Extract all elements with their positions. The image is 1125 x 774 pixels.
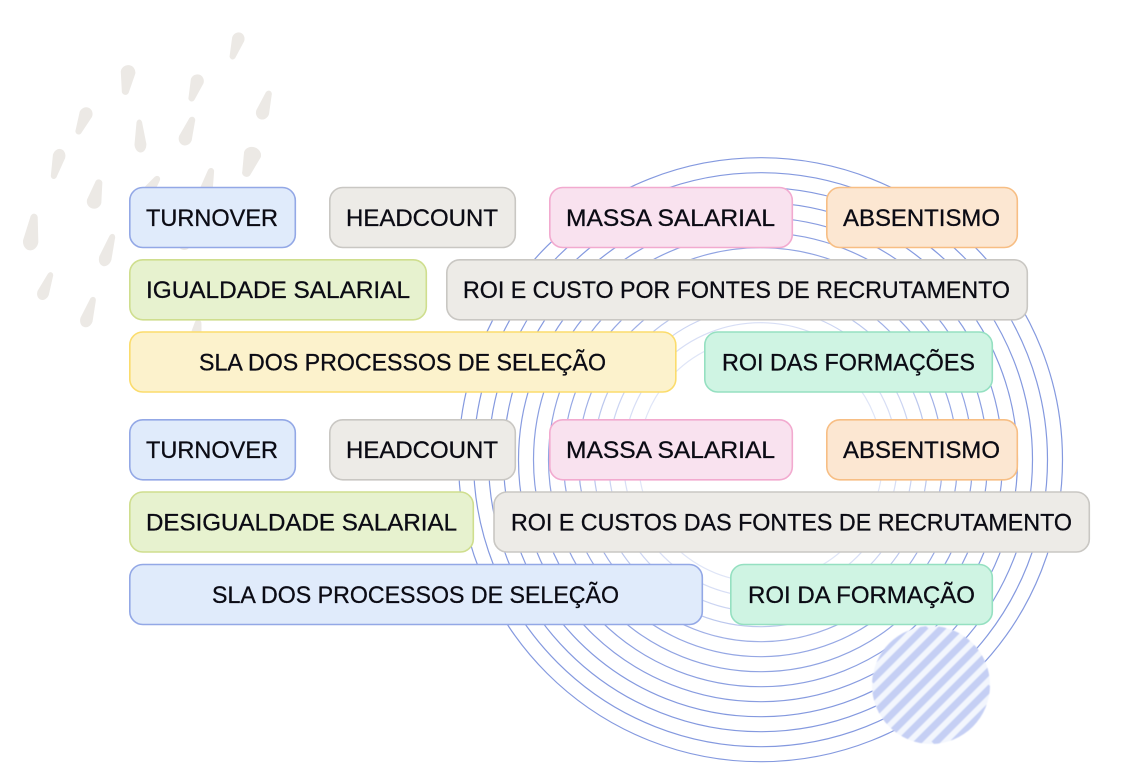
- group 1: chip ROI DAS FORMAÇÕES: ROI DAS FORMAÇÕES: [722, 348, 975, 376]
- group 1: chip TURNOVER: TURNOVER: [146, 205, 278, 232]
- decorative drops cluster: [22, 31, 276, 351]
- group 1: chip ROI DAS FORMAÇÕES: [705, 332, 992, 392]
- group 1: chip IGUALDADE SALARIAL: IGUALDADE SALARIAL: [146, 277, 410, 304]
- group 2: chip ABSENTISMO: [827, 420, 1017, 480]
- hatched circle: [871, 626, 991, 744]
- group 2: chip ROI DA FORMAÇÃO: [731, 564, 992, 624]
- group 1: chip ROI E CUSTO POR FONTES DE RECRUTAMENTO: ROI E CUSTO POR FONTES DE RECRUTAMENTO: [463, 277, 1010, 304]
- group 2: chip SLA DOS PROCESSOS DE SELEÇÃO: [130, 564, 702, 624]
- group 1: chip IGUALDADE SALARIAL: [130, 260, 426, 320]
- group 2: chip DESIGUALDADE SALARIAL: DESIGUALDADE SALARIAL: [146, 510, 457, 536]
- group 2: chip SLA DOS PROCESSOS DE SELEÇÃO: SLA DOS PROCESSOS DE SELEÇÃO: [212, 582, 619, 609]
- group 2: chip TURNOVER: [130, 420, 295, 480]
- group 2: chip MASSA SALARIAL: MASSA SALARIAL: [566, 437, 775, 464]
- group 2: chip HEADCOUNT: [330, 420, 515, 480]
- group 1: chip ABSENTISMO: [827, 188, 1017, 248]
- group 2: chip ROI E CUSTOS DAS FONTES DE RECRUTAMENTO: ROI E CUSTOS DAS FONTES DE RECRUTAMENTO: [511, 510, 1072, 536]
- group 1: chip MASSA SALARIAL: [550, 188, 792, 248]
- group 2: chip MASSA SALARIAL: [550, 420, 792, 480]
- group 1: chip ROI E CUSTO POR FONTES DE RECRUTAMENTO: [447, 260, 1027, 320]
- group 2: chip ABSENTISMO: ABSENTISMO: [843, 437, 1000, 464]
- group 2: chip ROI DA FORMAÇÃO: ROI DA FORMAÇÃO: [748, 582, 975, 609]
- group 2: chip ROI E CUSTOS DAS FONTES DE RECRUTAMENTO: [494, 492, 1089, 552]
- group 1: chip HEADCOUNT: [330, 188, 515, 248]
- group 1: chip TURNOVER: [130, 188, 295, 248]
- group 1: chip SLA DOS PROCESSOS DE SELEÇÃO: SLA DOS PROCESSOS DE SELEÇÃO: [199, 350, 606, 376]
- group 1: chip ABSENTISMO: ABSENTISMO: [843, 205, 1000, 232]
- group 1: chip MASSA SALARIAL: MASSA SALARIAL: [566, 205, 775, 232]
- group 1: chip HEADCOUNT: HEADCOUNT: [346, 205, 498, 232]
- group 2: chip DESIGUALDADE SALARIAL: [130, 492, 473, 552]
- group 1: chip SLA DOS PROCESSOS DE SELEÇÃO: [130, 332, 676, 392]
- group 2: chip TURNOVER: TURNOVER: [146, 437, 278, 464]
- concentric rings: [458, 158, 1062, 762]
- group 2: chip HEADCOUNT: HEADCOUNT: [346, 437, 498, 464]
